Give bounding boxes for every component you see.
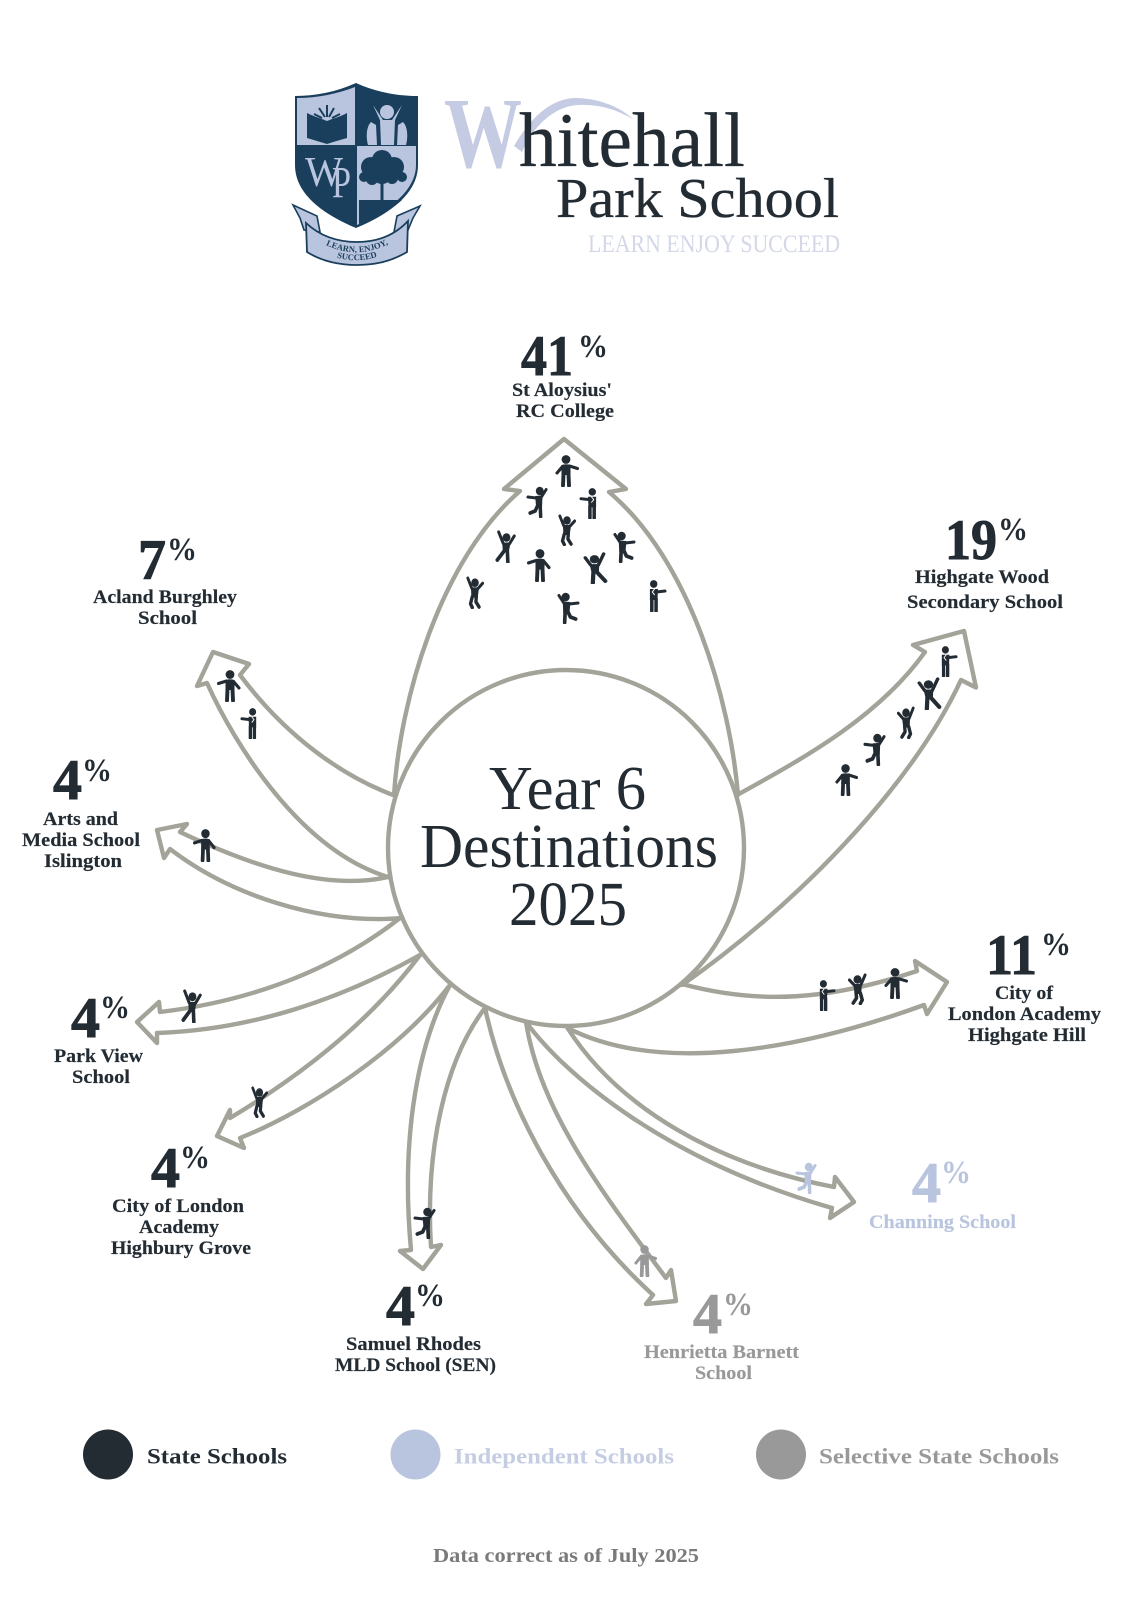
legend: State Schools: State Schools [147,1444,287,1468]
label: Channing School 4%: Channing School [869,1212,1016,1233]
label: City of London Academy Highbury Grove 4% [111,1137,251,1259]
label: Acland Burghley 7%: 7 [138,529,166,592]
arrow: Arts and Media [157,824,403,919]
label: Acland Burghley 7%: Acland Burghley [93,587,238,608]
crest shield: W [305,150,343,196]
crest shield [295,83,418,228]
label: Acland Burghley 7% [93,529,238,629]
label: Highgate Wood 19%: 19 [945,509,997,572]
legend [83,1430,1059,1480]
label: Henrietta Barnett 4% [644,1283,800,1384]
label: Acland Burghley 7%: % [167,532,197,568]
label: St Aloysius 41% [512,325,614,422]
label: Henrietta Barnett 4%: School [695,1363,752,1384]
label: Arts and Media School Islington 4%: 4 [53,749,82,812]
label: Arts and Media School Islington 4%: Arts and [43,809,118,830]
pupil: Samuel Rhodes arrow [415,1208,434,1238]
label: Samuel Rhodes 4%: % [415,1278,445,1314]
label: City of London Academy Highgate Hill 11%: Highgate Hill [968,1025,1086,1046]
label: City of London Academy Highbury Grove 4%: City of London [112,1196,244,1217]
label: Park View School 4% [54,987,143,1088]
label: St Aloysius 41%: St Aloysius' [512,380,612,401]
legend: Selective State Schools [756,1430,1059,1480]
arrow: Channing [526,1022,854,1218]
title: 2025: 2025 [509,871,627,939]
label: City of London Academy Highgate Hill 11%: City of [995,983,1054,1004]
label: City of London Academy Highgate Hill 11%: 11 [986,924,1037,987]
label: Channing School 4% [869,1152,1016,1233]
label: Park View School 4%: Park View [54,1046,143,1067]
arrow: Highgate Wood [682,631,976,985]
wordmark: Park School: Park School [556,168,839,230]
label: Arts and Media School Islington 4% [22,749,140,872]
title: Year 6: Year 6 [489,755,646,823]
footnote: Data correct as of July 2025 [433,1545,699,1567]
logo: school crest [291,83,422,266]
label: Arts and Media School Islington 4%: Islington [44,851,122,872]
label: Samuel Rhodes 4%: Samuel Rhodes [346,1334,481,1355]
label: City of London Academy Highgate Hill 11% [948,924,1102,1046]
label: Highgate Wood 19% [907,509,1063,613]
label: St Aloysius 41%: 41 [521,325,573,388]
title: Destinations: Destinations [420,813,718,881]
wordmark: Whitehall: hitehall [519,97,745,183]
pupil: Channing arrow [797,1163,815,1192]
crest ribbon with motto: LEARN, ENJOY, [326,240,388,254]
label: Park View School 4%: School [72,1067,130,1088]
legend: Selective State Schools: Selective State Schools [819,1444,1059,1468]
pupils: Acland Burghley arrow [218,670,256,738]
pupil: Henrietta Barnett arrow [636,1245,656,1276]
wordmark: strapline: LEARN ENJOY SUCCEED [588,231,840,258]
crest shield: P [332,158,351,207]
arrow: Samuel Rhodes [400,985,485,1269]
pupils: St Aloysius arrow [468,455,665,622]
crest ribbon with motto [291,203,422,266]
label: City of London Academy Highbury Grove 4%: % [180,1140,210,1176]
wordmark W and swoosh [444,77,633,189]
label: Samuel Rhodes 4% [335,1275,496,1376]
logo: school wordmark [444,77,840,258]
label: Henrietta Barnett 4%: 4 [693,1283,722,1346]
legend: Independent Schools [390,1430,674,1480]
pupil: Park View arrow [183,991,200,1022]
legend: State Schools [83,1430,287,1480]
label: Henrietta Barnett 4%: Henrietta Barnett [644,1342,800,1363]
arrow: St Aloysius [394,439,738,795]
arrow: City of London Academy Highgate Hill [568,961,947,1053]
label: Samuel Rhodes 4%: 4 [386,1275,415,1338]
label: Channing School 4%: 4 [912,1152,941,1215]
pupil: Arts and Media arrow [194,829,214,860]
arrow: Acland Burghley [197,652,393,877]
label: Park View School 4%: 4 [71,987,100,1050]
pupils: Highgate Wood arrow [837,646,956,794]
label: Samuel Rhodes 4%: MLD School (SEN) [335,1355,496,1376]
pupils: Highgate Hill arrow [820,968,906,1010]
pupil: Highbury Grove arrow [253,1088,267,1116]
label: City of London Academy Highbury Grove 4%: 4 [151,1137,180,1200]
label: City of London Academy Highbury Grove 4%: Academy [139,1217,220,1238]
label: City of London Academy Highgate Hill 11%: % [1041,927,1071,963]
label: City of London Academy Highbury Grove 4%: Highbury Grove [111,1238,251,1259]
label: Arts and Media School Islington 4%: % [82,753,112,789]
crest ribbon with motto: SUCCEED [337,252,376,260]
label: Highgate Wood 19%: % [998,512,1028,548]
arrow: City of London Academy Highbury Grove [217,955,450,1148]
central circle with title [388,670,744,1026]
label: Henrietta Barnett 4%: % [723,1287,753,1323]
legend: Independent Schools: Independent Schools [454,1444,674,1468]
label: Acland Burghley 7%: School [138,608,197,629]
label: City of London Academy Highgate Hill 11%: London Academy [948,1004,1102,1025]
label: Highgate Wood 19%: Highgate Wood [915,567,1049,588]
arrow: Henrietta Barnett [485,1008,676,1304]
label: Channing School 4%: % [941,1155,971,1191]
arrow: Park View [137,918,420,1043]
label: St Aloysius 41%: RC College [516,401,614,422]
label: Highgate Wood 19%: Secondary School [907,592,1063,613]
label: Arts and Media School Islington 4%: Media School [22,830,140,851]
wordmark W and swoosh: W [444,77,522,189]
label: St Aloysius 41%: % [578,329,608,365]
label: Park View School 4%: % [100,990,130,1026]
